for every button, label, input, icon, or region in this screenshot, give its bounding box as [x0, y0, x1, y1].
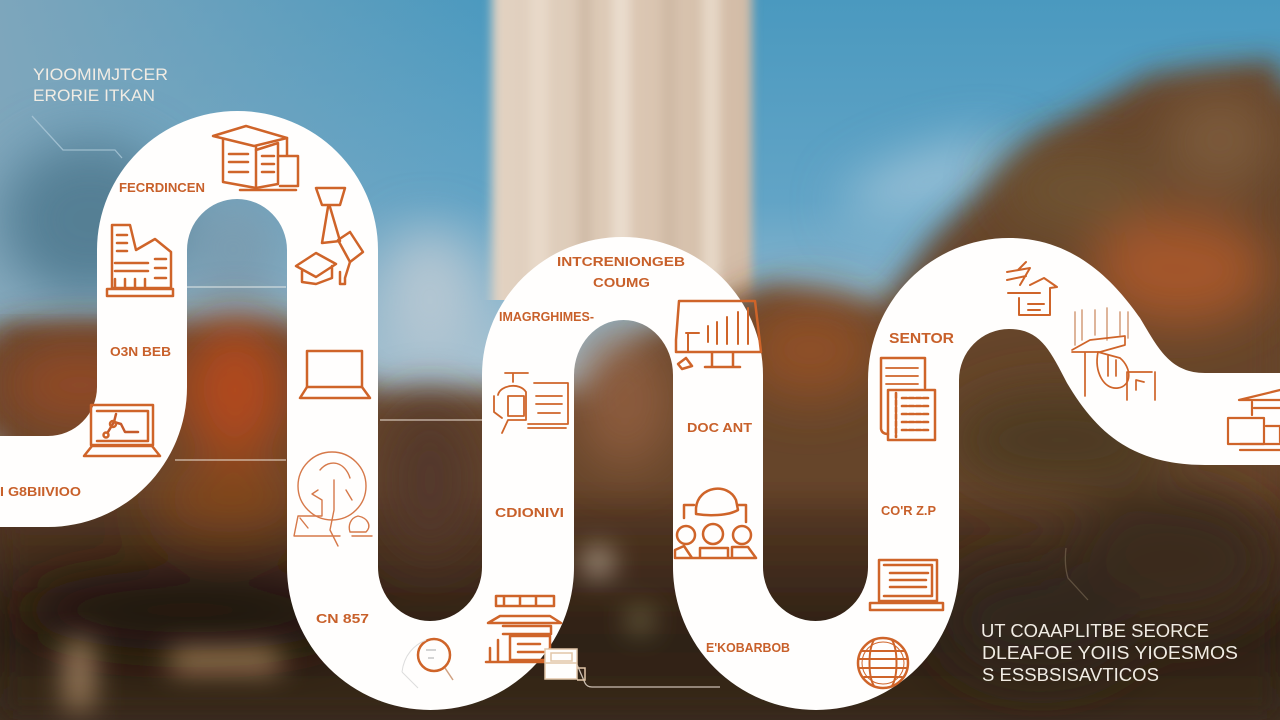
icon: small cabinet	[545, 649, 585, 680]
title: YIOOMIMJTCER	[33, 65, 168, 84]
icon: storefront	[486, 596, 561, 662]
icon: desk computer	[1228, 390, 1280, 450]
road labels: DOC ANT	[687, 420, 752, 435]
road labels	[0, 180, 954, 655]
icon: laptop with network	[84, 405, 160, 456]
icon: desk and house	[1007, 262, 1057, 315]
road labels: FECRDINCEN	[119, 180, 205, 195]
icon: head in circle	[294, 452, 372, 546]
bottom-right text block	[981, 621, 1238, 685]
road labels: CDIONIVI	[495, 505, 564, 520]
road labels: E'KOBARBOB	[706, 640, 790, 655]
road labels: INTCRENIONGEB	[557, 254, 685, 269]
road labels: IMAGRGHIMES-	[499, 309, 594, 324]
icon: camera and document	[494, 373, 568, 433]
bottom-right text block: DLEAFOE YOIIS YIOESMOS	[982, 643, 1238, 663]
bottom-right text block: S ESSBSISAVTICOS	[982, 665, 1159, 685]
road labels: CO'R Z.P	[881, 503, 936, 518]
icon: documents and spreadsheet	[881, 358, 935, 440]
road labels: I G8BIIVIOO	[0, 484, 81, 499]
icon: plain laptop	[300, 351, 370, 398]
road labels: O3N BEB	[110, 344, 171, 359]
title: ERORIE ITKAN	[33, 86, 155, 105]
icon: monitor with bar chart	[676, 301, 761, 369]
road labels: COUMG	[593, 275, 650, 290]
icon: laptop with text	[870, 560, 943, 610]
icon: audience	[675, 489, 756, 558]
bottom-right text block: UT COAAPLITBE SEORCE	[981, 621, 1209, 641]
icon: office building	[107, 225, 173, 296]
title	[33, 65, 168, 105]
road labels: SENTOR	[889, 330, 954, 347]
road labels: CN 857	[316, 611, 369, 626]
icon: magnifying glass	[402, 639, 453, 688]
icon: globe	[858, 638, 908, 688]
icon: trophy and graduation cap	[296, 188, 363, 284]
icon: trees and lamp	[1072, 308, 1155, 400]
connector lines	[32, 116, 1088, 687]
icon: book and cap	[213, 126, 298, 190]
